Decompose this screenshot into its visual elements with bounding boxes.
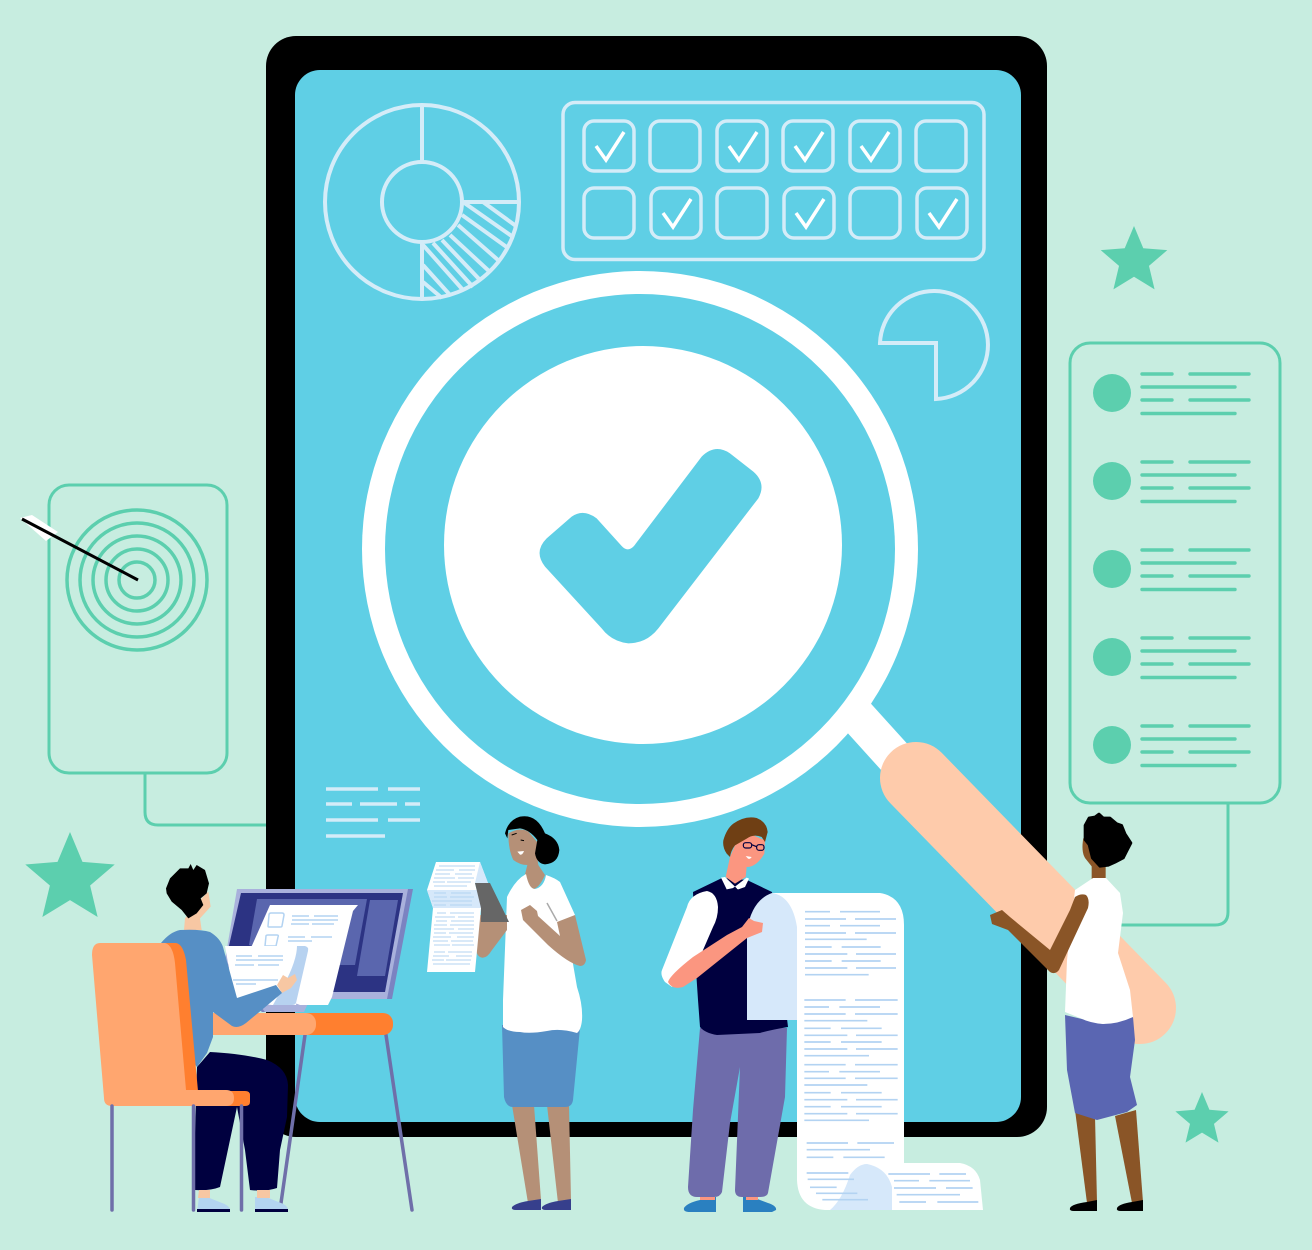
magnifying glass: [362, 271, 1140, 1008]
panel: target: [49, 485, 227, 773]
skirt: [502, 1025, 580, 1107]
panel: list: [1070, 343, 1280, 803]
head: [721, 817, 768, 892]
icon: star left: [25, 832, 115, 917]
chair legs: [112, 1106, 242, 1210]
person: woman with tablet: [427, 816, 586, 1210]
shoes: [1070, 1200, 1097, 1211]
tablet device: [475, 883, 509, 922]
shirt: [1065, 878, 1133, 1024]
head: [166, 864, 211, 930]
connector lines: [145, 773, 1228, 925]
shoes: [512, 1199, 541, 1210]
small pie outline: [880, 291, 988, 399]
hand: [277, 974, 297, 993]
paper sheet: [225, 946, 308, 1005]
scroll paper: [773, 893, 983, 1210]
shoes: [197, 1197, 230, 1212]
scroll fold: [747, 893, 797, 1020]
text lines on screen: [326, 789, 420, 836]
desk: [213, 1013, 393, 1035]
arrow: [20, 515, 138, 580]
icon: star bottom right: [1175, 1092, 1229, 1143]
trousers: [195, 1052, 288, 1191]
arm: [990, 894, 1089, 973]
left arm: [476, 915, 507, 958]
monitor: [225, 889, 413, 1012]
icon: check mark: [540, 449, 762, 643]
scroll text lines: [804, 912, 978, 1202]
head: [1082, 814, 1131, 880]
trousers: [688, 1028, 787, 1197]
person: woman holding handle: [990, 814, 1143, 1211]
right arm: [521, 905, 586, 966]
person: man at desk: [92, 864, 413, 1212]
legs: [512, 1105, 541, 1203]
head: [505, 816, 559, 889]
legs: [1075, 1110, 1097, 1203]
icon: star top right: [1101, 226, 1167, 289]
sweater: [161, 930, 282, 1067]
checklist panel: [563, 102, 984, 260]
sleeve: [661, 891, 718, 987]
person: man with scroll: [661, 817, 983, 1212]
scroll bottom fold: [830, 1164, 892, 1210]
shirt: [503, 874, 582, 1033]
tablet: [266, 36, 1047, 1137]
chair: [92, 943, 250, 1106]
donut chart: [325, 105, 519, 299]
paper: [427, 862, 488, 972]
desk legs: [280, 1035, 412, 1210]
arm: [668, 918, 763, 988]
shoes: [684, 1197, 716, 1212]
skirt: [1065, 1015, 1137, 1120]
vest: [693, 878, 788, 1035]
